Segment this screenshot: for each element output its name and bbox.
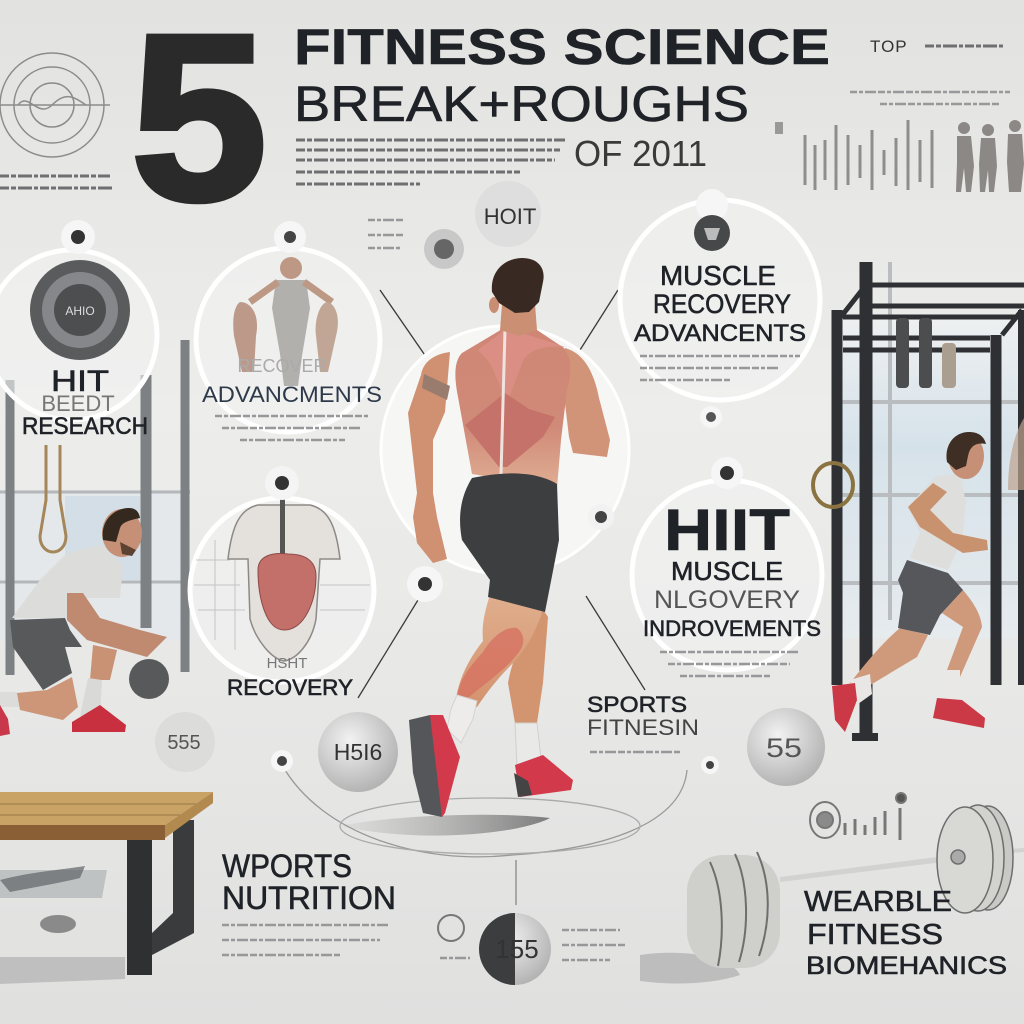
heading: sports fitness (587, 692, 699, 752)
heading: wearable fitness biomechanics (804, 886, 1007, 980)
anatomy grid (194, 540, 370, 650)
bench front (0, 825, 165, 840)
heading: INDROVEMENTS (643, 616, 821, 641)
barbell shadow (640, 953, 740, 983)
thigh (17, 677, 78, 720)
bench front leg (127, 838, 152, 975)
top right label (870, 37, 1005, 56)
lower back muscle (465, 393, 555, 467)
back leg (850, 628, 928, 687)
heading: sports fitness: FITNESIN (587, 715, 699, 740)
badge: anatomy (265, 466, 299, 500)
bench (0, 792, 213, 984)
stat badge: H576 (318, 712, 398, 792)
badge: mid right (700, 406, 722, 428)
badge (711, 457, 743, 489)
barbell (640, 805, 1024, 983)
back shoe (832, 683, 857, 732)
badge: center left (407, 566, 443, 602)
shirt (12, 545, 123, 618)
central runner figure (408, 258, 610, 817)
bench top (0, 792, 213, 825)
top left concentric diagram (0, 53, 110, 157)
panel: HIT research (0, 250, 157, 440)
bench back leg (152, 820, 194, 955)
heading: wearable fitness biomechanics: FITNESS (807, 919, 943, 951)
back leg (508, 605, 548, 723)
panel: recovery anatomy (190, 498, 374, 682)
bottom left scribbles (0, 866, 107, 933)
heading: research: RESEARCH (22, 413, 148, 440)
badge: lower right connector (701, 756, 719, 774)
small logo above barbell (810, 793, 906, 840)
stat badge: 55 (747, 708, 825, 786)
heading: NLGOVERY (654, 586, 800, 614)
left plate (687, 852, 780, 968)
beard (120, 542, 136, 556)
heading: wearable fitness biomechanics: BIOMEHANICS (806, 952, 1007, 980)
badge top (696, 189, 728, 221)
stat badge: 55: 55 (766, 733, 802, 763)
small icon bottom center (438, 915, 625, 960)
heading: sports fitness: SPORTS (587, 692, 687, 717)
runner shadow (340, 815, 550, 836)
front shoe (933, 698, 985, 728)
hair (947, 432, 986, 470)
small badge: HOIT: HOIT (484, 204, 536, 229)
heading: MUSCLE (660, 260, 776, 291)
title: BREAK+ROUGHS (294, 76, 749, 132)
heading: ADVANCENTS (634, 320, 806, 347)
stat badge: 555 (155, 712, 215, 772)
anatomy torso (228, 498, 340, 661)
badge: advancements (274, 221, 306, 253)
text block (640, 356, 800, 380)
hair (103, 508, 140, 542)
shorts (898, 560, 963, 635)
left crouching figure (0, 508, 169, 736)
heading: recovery: HSHT (267, 655, 307, 672)
shorts (10, 618, 82, 690)
small badge: HOIT (475, 181, 541, 247)
badge: HIT (61, 220, 95, 254)
panel: advancements (196, 248, 380, 432)
gym rig right (813, 262, 1024, 741)
ear (489, 297, 499, 313)
top right mini chart with figures (775, 92, 1024, 192)
torso (455, 328, 570, 488)
heading: sports nutrition (222, 848, 396, 955)
heading: wearable fitness biomechanics: WEARBLE (804, 886, 952, 918)
panel: muscle recovery advancements (620, 189, 820, 400)
icon: left shoe (409, 715, 460, 817)
heading: recovery: RECOVERY (227, 675, 353, 700)
figures group (233, 257, 338, 386)
right plate (937, 805, 1013, 913)
top right label: TOP (870, 37, 908, 56)
icon: shoe (72, 705, 126, 732)
left arm (408, 352, 450, 563)
icon: right shoe (514, 755, 573, 797)
bar (780, 854, 960, 882)
icon: small lens (424, 229, 464, 269)
lower leg (90, 645, 117, 680)
title (294, 19, 830, 174)
stat badge: 555: 555 (167, 732, 201, 754)
badge: lower left connector (271, 750, 293, 772)
intro text block (296, 140, 565, 184)
title: OF 2011 (574, 133, 707, 174)
faded sub heading: BEEDT (41, 391, 115, 416)
shirt (908, 473, 966, 570)
gym rack left (10, 340, 185, 675)
stat badge: H576: H5I6 (334, 739, 382, 765)
trapezius muscle (478, 328, 565, 395)
bench shadow (0, 957, 125, 984)
heading: sports nutrition: WPORTS (222, 848, 352, 884)
icon: dial (30, 260, 130, 360)
small text: center left (368, 220, 404, 248)
right runner figure (832, 432, 988, 732)
bench side (165, 792, 213, 838)
right arm (564, 348, 610, 457)
front leg (455, 588, 543, 707)
gym window backdrop right (836, 262, 1024, 638)
stat badge: 155: 155 (495, 934, 539, 964)
heading (643, 498, 821, 641)
top left caption (0, 176, 112, 188)
head (948, 433, 984, 479)
neck (500, 304, 537, 336)
faint figure at edge (1008, 418, 1024, 490)
icon (694, 215, 730, 251)
hanging figures (896, 318, 956, 388)
heading: HIIT (664, 498, 790, 563)
head (102, 509, 142, 557)
faded label: RECOVER (237, 356, 327, 376)
arm (908, 483, 988, 553)
text block: advancements (215, 416, 370, 440)
heading: RECOVERY (653, 289, 791, 319)
title: FITNESS SCIENCE (294, 19, 830, 75)
hair (492, 258, 544, 313)
gym window backdrop left (0, 490, 190, 640)
front leg (942, 590, 982, 677)
connector lines (282, 290, 687, 905)
heading: recovery (227, 655, 353, 700)
arm band (422, 374, 450, 400)
panel: HIIT muscle recovery improvements (632, 457, 822, 676)
stat badge: 155 (479, 913, 551, 985)
heading: advancements: ADVANCMENTS (202, 382, 382, 407)
shorts (460, 473, 559, 612)
heading: HIT: HIT (51, 365, 109, 398)
back sock and shoe (0, 692, 20, 707)
white circle behind runner (381, 326, 629, 574)
heading (634, 260, 806, 347)
arm (67, 593, 167, 657)
icon: gymnastic ring (813, 463, 853, 507)
heading: MUSCLE (671, 556, 783, 586)
icon: dial: AHIO (65, 304, 95, 318)
icon: medicine ball (129, 659, 169, 699)
text block (660, 652, 800, 676)
heading: sports nutrition: NUTRITION (222, 880, 396, 916)
badge: center right (588, 504, 614, 530)
